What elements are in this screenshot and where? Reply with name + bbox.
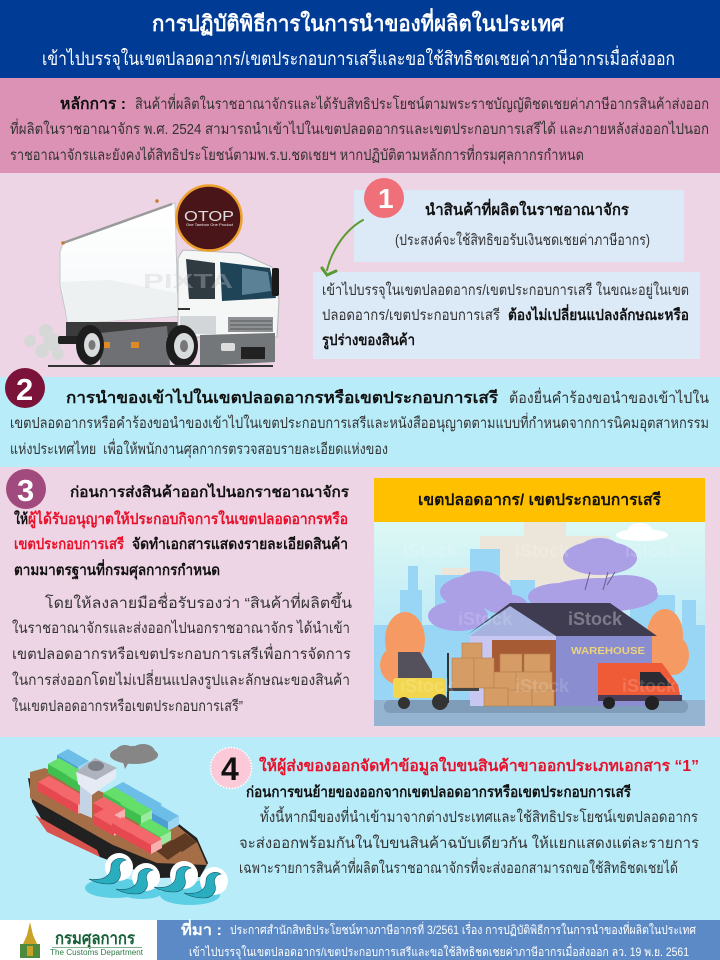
OTOP badge: One Tambon One Product [186, 223, 233, 227]
step 2 heading: การนำของเข้าไปในเขตปลอดอากรหรือเขตประกอบการเสรี [66, 388, 498, 407]
watermark: iStock [622, 676, 677, 696]
bridge tower [80, 780, 92, 818]
OTOP badge [176, 186, 242, 250]
smoke [110, 744, 158, 769]
step 4 paragraph: จะส่งออกพร้อมกันในใบขนสินค้าฉบับเดียวกัน ให้แยกแสดงแต่ละรายการ [239, 834, 699, 852]
footer logo: The Customs Department [50, 948, 144, 957]
hull [28, 778, 208, 878]
orange trees [380, 609, 689, 685]
OTOP badge: OTOP [184, 208, 234, 225]
clouds [616, 523, 668, 541]
step 3 bold text: เขตประกอบการเสรี [14, 536, 125, 553]
watermark: PIXTA [143, 271, 233, 293]
principle text: ราชอาณาจักรและยังคงได้สิทธิประโยชน์ตามพ.ร.บ.ชดเชยฯ หากปฏิบัติตามหลักการที่กรมศุลกากรกำหนด [10, 144, 584, 165]
exhaust smoke [24, 324, 164, 366]
number badge 2: 2 [16, 372, 33, 407]
step 4 paragraph [239, 806, 699, 877]
step 1 detail box: ปลอดอากร/เขตประกอบการเสรี [322, 307, 500, 324]
cab [178, 250, 279, 337]
footer logo: กรมศุลกากร [55, 929, 136, 949]
step 3 paragraph: เขตปลอดอากรหรือเขตประกอบการเสรีเพื่อการจัดการ [12, 643, 351, 663]
step 1 box [354, 190, 684, 262]
number badge 4 [210, 748, 252, 788]
panel: principle [0, 78, 720, 173]
watermark: iStock [458, 609, 513, 629]
number badge 3 [6, 469, 46, 509]
boxes [492, 640, 556, 706]
step 2 text: ต้องยื่นคำร้องขอนำของเข้าไปใน [509, 387, 709, 407]
panel: warehouse [374, 478, 705, 726]
panel: step 4 [0, 737, 720, 920]
header banner [0, 0, 720, 78]
step 3 paragraph: โดยให้ลงลายมือชื่อรับรองว่า “สินค้าที่ผลิตขึ้น [45, 592, 352, 612]
building [470, 636, 556, 706]
step 1 detail box: รูปร่างของสินค้า [322, 331, 415, 350]
watermark: iStock [403, 541, 458, 561]
step 1 detail box: ต้องไม่เปลี่ยนแปลงลักษณะหรือ [508, 304, 689, 324]
wheels [76, 325, 104, 365]
footer logo [0, 920, 157, 960]
footer source [157, 919, 720, 960]
panel: step 1 background [0, 173, 720, 377]
containers [57, 749, 89, 776]
principle text [10, 93, 709, 165]
step 3 bold text: จัดทำเอกสารแสดงรายละเอียดสินค้า [132, 535, 348, 553]
watermark: iStock [515, 676, 570, 696]
step 2 text: แห่งประเทศไทย เพื่อให้พนักงานศุลกากรตรวจสอบรายละเอียดแห่งของ [10, 438, 388, 459]
number badge 1 [364, 178, 404, 218]
cargo box [60, 203, 178, 324]
ship illustration [28, 744, 228, 905]
grille and bumper [228, 317, 273, 332]
purple trees [428, 538, 658, 631]
number badge 2 [5, 368, 45, 408]
watermark: iStock [515, 541, 570, 561]
number badge 3: 3 [17, 473, 34, 508]
step 4 red heading: ให้ผู้ส่งของออกจัดทำข้อมูลใบขนสินค้าขาออกประเภทเอกสาร “1” [259, 756, 699, 777]
step 3 bold text [14, 482, 350, 580]
delivery van [598, 663, 682, 710]
title: การปฏิบัติพิธีการในการนำของที่ผลิตในประเทศ [152, 7, 565, 36]
watermark [400, 541, 680, 696]
warehouse illustration [374, 522, 705, 726]
step 1 heading: นำสินค้าที่ผลิตในราชอาณาจักร [425, 198, 630, 219]
step 3 paragraph: ในราชอาณาจักรและส่งออกไปนอกราชอาณาจักร ได้นำเข้า [12, 619, 350, 637]
watermark: iStock [568, 609, 623, 629]
step 3 paragraph [12, 592, 352, 715]
step 1 detail box [313, 272, 700, 359]
warehouse heading [374, 478, 705, 522]
step 3 bold text: ผู้ได้รับอนุญาตให้ประกอบกิจการในเขตปลอดอากรหรือ [28, 509, 348, 529]
step 3 bold text: ตามมาตรฐานที่กรมศุลกากรกำหนด [14, 559, 220, 580]
ground [374, 700, 705, 726]
watermark: iStock [625, 541, 680, 561]
arrow: step 1 to detail [322, 220, 363, 275]
step 3 bold text: ก่อนการส่งสินค้าออกไปนอกราชอาณาจักร [70, 482, 350, 501]
waves [85, 853, 228, 905]
truck illustration [24, 186, 279, 367]
warehouse sign: WAREHOUSE [571, 645, 645, 657]
step 4 bold line: ก่อนการขนย้ายของออกจากเขตปลอดอากรหรือเขตประกอบการเสรี [246, 784, 632, 801]
footer source: ที่มา : [181, 919, 222, 939]
chassis [66, 322, 178, 336]
number badge 1: 1 [378, 183, 394, 214]
watermark: iStock [400, 676, 455, 696]
panel: step 3 [0, 467, 720, 737]
emblem [20, 922, 40, 958]
number badge 4: 4 [221, 751, 239, 787]
forklift [393, 652, 479, 710]
step 1 note: (ประสงค์จะใช้สิทธิขอรับเงินชดเชยค่าภาษีอากร) [395, 231, 650, 249]
principle label: หลักการ : [60, 95, 126, 113]
step 3 bold text: ให้ [14, 510, 28, 528]
step 3 paragraph: ในเขตปลอดอากรหรือเขตประกอบการเสรี” [12, 697, 243, 715]
step 3 paragraph: ในการส่งออกโดยไม่เปลี่ยนแปลงรูปและลักษณะของสินค้า [12, 669, 350, 689]
warehouse heading: เขตปลอดอากร/ เขตประกอบการเสรี [418, 490, 661, 509]
step 2 text [10, 387, 709, 459]
panel: step 2 [0, 377, 720, 467]
